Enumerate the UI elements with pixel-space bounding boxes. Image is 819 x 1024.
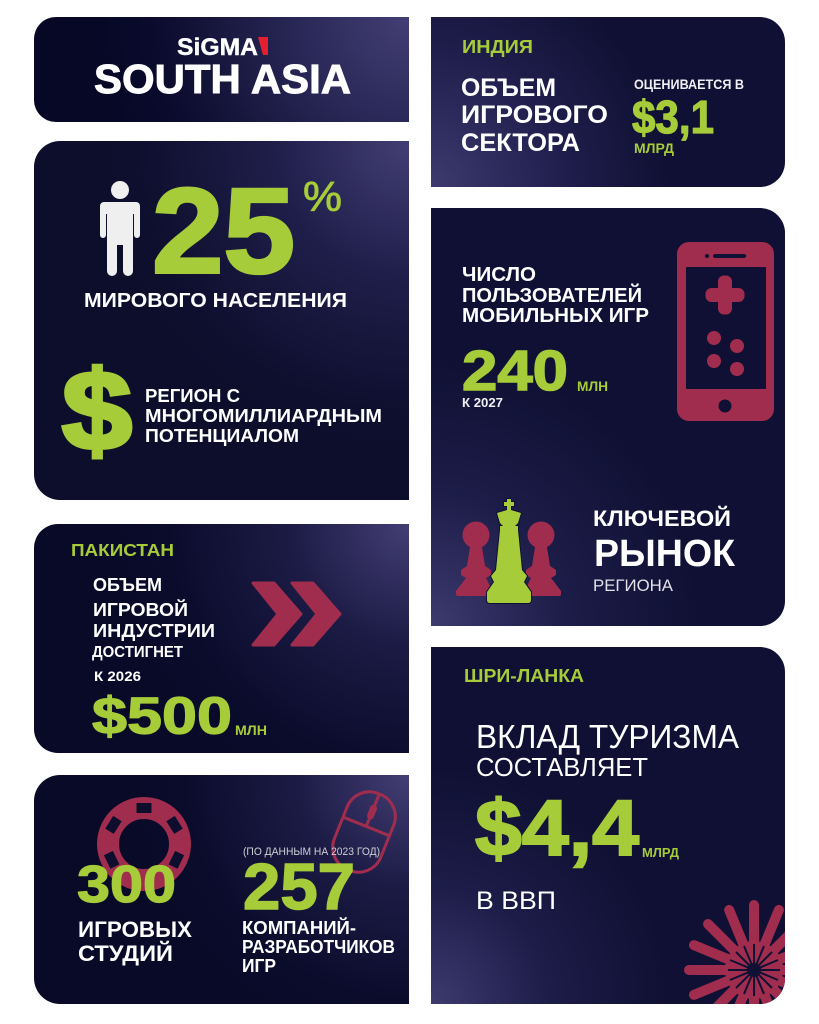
- text: data note: (ПО ДАННЫМ НА 2023 ГОД): [243, 846, 380, 858]
- text: of GDP: В ВВП: [476, 887, 556, 915]
- panel: world population: [34, 141, 409, 500]
- stat: $4.4 billion: МЛРД: [642, 846, 679, 860]
- heading: Pakistan: ПАКИСТАН: [71, 540, 174, 560]
- icon: casino chip: [104, 803, 184, 880]
- text: key market: РЫНОК: [594, 533, 736, 575]
- stat: $3.1 billion: МЛРД: [634, 141, 674, 156]
- text: by 2027: К 2027: [462, 395, 503, 410]
- text: key market: [593, 506, 736, 595]
- text: developer companies: КОМПАНИЙ-: [242, 917, 356, 938]
- text: gaming industry: [92, 575, 215, 684]
- icon: starburst: [684, 900, 785, 1004]
- text: developer companies: [242, 917, 395, 976]
- icon: computer mouse: [325, 785, 403, 879]
- text: gaming industry: К 2026: [94, 669, 142, 684]
- panel: Sri Lanka: [431, 647, 785, 1004]
- stat: 25 percent: %: [303, 173, 342, 220]
- text: developer companies: ИГР: [242, 955, 276, 976]
- logo: SiGMA wordmark: SiGMA: [177, 34, 258, 61]
- stat: 25 percent: 25: [152, 162, 295, 298]
- text: multibillion region: МНОГОМИЛЛИАРДНЫМ: [145, 406, 382, 426]
- stat: 240 million: [462, 339, 608, 403]
- text: tourism contribution: СОСТАВЛЯЕТ: [476, 752, 648, 782]
- stat: 257: 257: [243, 850, 355, 923]
- panel: Pakistan: [34, 524, 409, 753]
- stat: 300: 300: [77, 856, 176, 914]
- icon: dollar sign: $: [62, 348, 132, 473]
- text: key market: РЕГИОНА: [593, 576, 674, 595]
- text: gaming industry: ИНДУСТРИИ: [93, 621, 215, 641]
- icon: chess pieces: [456, 499, 561, 603]
- text: gaming industry: ОБЪЕМ: [93, 575, 162, 595]
- text: gaming sector: ОБЪЕМ: [461, 74, 556, 102]
- text: developer companies: РАЗРАБОТЧИКОВ: [242, 936, 395, 957]
- text: mobile game users: ПОЛЬЗОВАТЕЛЕЙ: [462, 283, 642, 307]
- text: gaming sector: СЕКТОРА: [461, 129, 580, 157]
- icon: person: [100, 181, 140, 276]
- text: multibillion region: РЕГИОН С: [145, 386, 240, 406]
- panel: studios and developers: [34, 775, 409, 1004]
- text: multibillion region: [145, 386, 382, 446]
- icon: smartphone with game controls: [677, 242, 774, 421]
- panel: India: [431, 17, 785, 187]
- text: key market: КЛЮЧЕВОЙ: [593, 506, 731, 531]
- stat: 240 million: МЛН: [577, 379, 608, 394]
- stat: $500 million: [92, 688, 267, 746]
- text: gaming industry: ДОСТИГНЕТ: [92, 644, 184, 661]
- icon: double chevron: [253, 583, 340, 645]
- text: gaming sector: ИГРОВОГО: [461, 101, 608, 129]
- panel: logo: [34, 17, 409, 122]
- text: tourism contribution: ВКЛАД ТУРИЗМА: [476, 718, 739, 755]
- text: multibillion region: ПОТЕНЦИАЛОМ: [145, 426, 299, 446]
- text: world population caption: МИРОВОГО НАСЕЛЕНИЯ: [84, 289, 347, 312]
- text: game studios: ИГРОВЫХ: [78, 917, 192, 942]
- text: mobile game users: [462, 264, 649, 327]
- heading: India: ИНДИЯ: [462, 37, 533, 57]
- text: valued at: ОЦЕНИВАЕТСЯ В: [634, 77, 744, 92]
- text: gaming sector: [461, 74, 608, 157]
- stat: $500 million: $500: [92, 688, 232, 746]
- stat: 240 million: 240: [462, 339, 568, 403]
- text: tourism contribution: [476, 718, 739, 782]
- text: mobile game users: МОБИЛЬНЫХ ИГР: [462, 305, 649, 327]
- stat: $4.4 billion: $4,4: [475, 783, 639, 872]
- logo: South Asia: SOUTH ASIA: [94, 56, 351, 102]
- heading: Sri Lanka: ШРИ-ЛАНКА: [464, 666, 584, 686]
- panel: mobile gamers and key market: [431, 208, 785, 626]
- text: mobile game users: ЧИСЛО: [462, 264, 536, 286]
- text: game studios: СТУДИЙ: [78, 941, 173, 966]
- text: gaming industry: ИГРОВОЙ: [93, 599, 188, 620]
- stat: $3.1 billion: $3,1: [632, 91, 714, 143]
- stat: $500 million: МЛН: [235, 722, 267, 738]
- text: game studios: [78, 917, 192, 966]
